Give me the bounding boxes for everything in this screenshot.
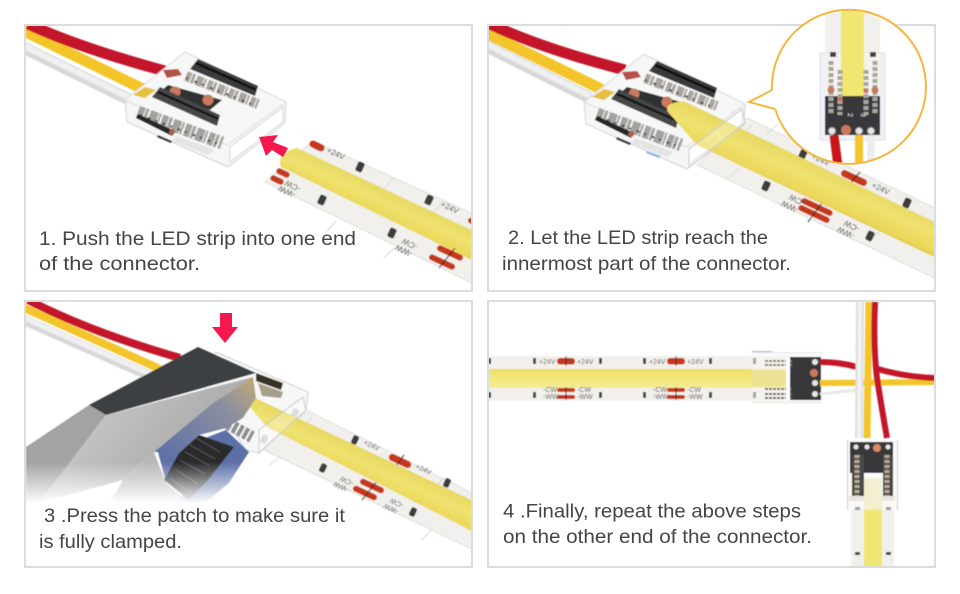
LED strip: +24V bbox=[870, 181, 892, 197]
wires to connector bbox=[486, 24, 625, 98]
horizontal LED strip: +24V bbox=[649, 359, 666, 366]
LED strip bbox=[265, 139, 480, 287]
connector bbox=[584, 54, 745, 169]
wires bbox=[820, 302, 935, 438]
callout: magnified connector bbox=[749, 5, 926, 166]
panel: step 3 bbox=[22, 300, 480, 567]
wires to connector bbox=[22, 24, 165, 100]
connector front lip bbox=[689, 109, 745, 167]
LED strip bbox=[259, 408, 480, 553]
LED strip: -WW bbox=[394, 242, 414, 258]
wires to pliers bbox=[22, 300, 180, 376]
caption: step 4: 4 .Finally, repeat the above steps bbox=[503, 500, 801, 522]
LED strip: -WW bbox=[382, 501, 400, 515]
horizontal LED strip: +24V bbox=[687, 359, 704, 366]
horizontal LED strip: -WW bbox=[653, 394, 669, 401]
vertical LED strip bbox=[851, 475, 894, 567]
LED strip: +24V bbox=[414, 463, 432, 477]
caption: step 4: on the other end of the connector. bbox=[503, 526, 812, 548]
LED strip: -CW bbox=[389, 496, 405, 509]
LED strip: -WW bbox=[836, 224, 856, 240]
horizontal LED strip: -CW bbox=[577, 387, 591, 394]
caption: step 3: is fully clamped. bbox=[39, 531, 182, 553]
caption: step 3 bbox=[39, 505, 346, 553]
LED strip: -CW bbox=[339, 474, 355, 487]
LED strip: -CW bbox=[787, 192, 806, 207]
horizontal LED strip: -WW bbox=[543, 394, 559, 401]
horizontal LED strip: -CW bbox=[543, 387, 557, 394]
callout: magnified connector: 2 bbox=[846, 113, 853, 117]
caption: step 1: of the connector. bbox=[39, 253, 200, 275]
caption: step 4 bbox=[503, 500, 812, 548]
horizontal LED strip: -WW bbox=[687, 394, 703, 401]
LED strip: -CW bbox=[400, 236, 419, 251]
LED strip: +24V bbox=[439, 200, 461, 216]
callout: magnified connector: 3 bbox=[859, 113, 866, 117]
LED strip: -WW bbox=[332, 479, 350, 493]
LED strip: -CW bbox=[283, 178, 302, 193]
LED strip: -CW bbox=[842, 218, 861, 233]
horizontal LED strip bbox=[488, 356, 790, 401]
horizontal connector bbox=[752, 351, 822, 403]
LED strip: -WW bbox=[277, 183, 297, 199]
panel: step 2 bbox=[486, 24, 945, 291]
caption: step 3: 3 .Press the patch to make sure it bbox=[44, 505, 346, 527]
connector bbox=[125, 52, 286, 167]
LED strip bbox=[691, 116, 945, 283]
vertical connector bbox=[847, 440, 898, 510]
panel: step 1 bbox=[22, 24, 480, 291]
caption: step 2 bbox=[502, 227, 791, 275]
fade under pliers bbox=[26, 462, 251, 504]
panel: step 4 bbox=[488, 301, 935, 567]
pliers bbox=[26, 347, 256, 503]
LED strip tube bbox=[667, 101, 945, 262]
caption: step 2: 2. Let the LED strip reach the bbox=[508, 227, 768, 249]
LED strip: +24V bbox=[325, 146, 347, 162]
LED strip: +24V bbox=[362, 439, 380, 453]
LED strip: -WW bbox=[780, 198, 800, 214]
blue reflection bbox=[646, 151, 661, 158]
caption: step 1: 1. Push the LED strip into one end bbox=[39, 228, 356, 250]
caption: step 2: innermost part of the connector. bbox=[502, 253, 791, 275]
horizontal LED strip: +24V bbox=[577, 359, 594, 366]
horizontal LED strip: -WW bbox=[577, 394, 593, 401]
connector bbox=[200, 352, 308, 453]
horizontal LED strip: -CW bbox=[653, 387, 667, 394]
caption: step 1 bbox=[39, 228, 356, 275]
horizontal LED strip: +24V bbox=[539, 359, 556, 366]
arrow: push direction bbox=[259, 135, 288, 157]
LED strip tube bbox=[247, 397, 480, 535]
connector front lip bbox=[259, 397, 306, 453]
LED strip: +24V bbox=[810, 152, 832, 168]
horizontal LED strip: -CW bbox=[687, 387, 701, 394]
arrow: press direction bbox=[212, 313, 238, 343]
